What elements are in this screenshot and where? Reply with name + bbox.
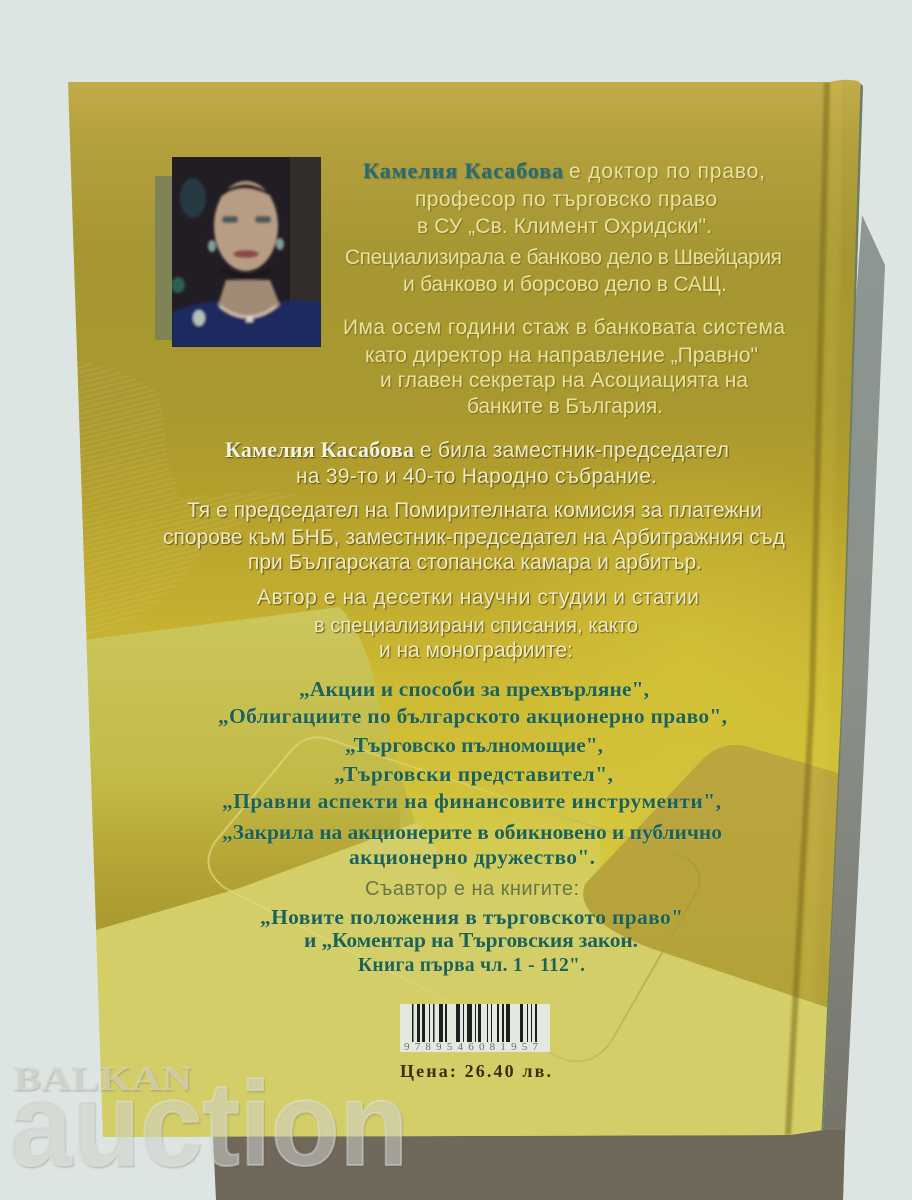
experience paragraph: банките в България. bbox=[467, 395, 663, 418]
chair paragraph: при Българската стопанска камара и арбитър. bbox=[248, 551, 702, 574]
spine highlight bbox=[827, 213, 836, 422]
monograph list: „Закрила на акционерите в обикновено и публично bbox=[222, 820, 722, 844]
co-authored books: „Новите положения в търговското право" bbox=[260, 905, 683, 929]
specialization paragraph: и банково и борсово дело в САЩ. bbox=[403, 273, 727, 296]
book shadow: bottom dark surface bbox=[213, 1130, 845, 1200]
monograph list: „Търговски представител", bbox=[334, 762, 613, 786]
author of paragraph: в специализирани списания, както bbox=[314, 615, 638, 637]
deputy chair paragraph: на 39-то и 40-то Народно събрание. bbox=[296, 465, 657, 488]
experience paragraph: Има осем години стаж в банковата система bbox=[343, 316, 785, 339]
co-author label: Съавтор е на книгите: bbox=[365, 878, 579, 900]
spine fold shadow bbox=[788, 82, 827, 1135]
monograph list bbox=[218, 677, 727, 869]
mesh wave pattern bbox=[68, 360, 300, 640]
intro paragraph bbox=[363, 158, 765, 238]
specialization paragraph bbox=[345, 246, 782, 296]
chair paragraph bbox=[163, 499, 785, 574]
book shadow: right wedge bbox=[780, 215, 885, 1200]
barcode bbox=[400, 1004, 550, 1053]
dark rounded shape right bbox=[583, 745, 845, 1010]
spine edge bbox=[823, 84, 862, 1130]
pale left panel bbox=[68, 607, 415, 930]
watermark: auction: auction bbox=[9, 1057, 408, 1191]
deputy chair paragraph: Камелия Касабова bbox=[225, 437, 414, 462]
lower pale panel, soft right part bbox=[400, 812, 600, 902]
monograph list: „Облигациите по българското акционерно право", bbox=[218, 704, 727, 728]
monograph list: акционерно дружество". bbox=[349, 845, 595, 869]
monograph list: „Акции и способи за прехвърляне", bbox=[299, 677, 649, 701]
author photo bbox=[155, 157, 321, 347]
specialization paragraph: Специализирала е банково дело в Швейцария bbox=[345, 246, 782, 269]
author of paragraph: Автор е на десетки научни студии и статии bbox=[257, 586, 699, 609]
deputy chair paragraph: е била заместник-председател bbox=[420, 439, 729, 462]
book cover bbox=[60, 70, 870, 1150]
chair paragraph: Тя е председател на Помирителната комисия за платежни bbox=[187, 499, 762, 522]
intro line two: професор по търговско право bbox=[415, 188, 717, 211]
experience paragraph: и главен секретар на Асоциацията на bbox=[380, 369, 748, 392]
intro line three: в СУ „Св. Климент Охридски". bbox=[417, 215, 712, 238]
intro line one rest: е доктор по право, bbox=[569, 160, 765, 183]
co-authored books: и „Коментар на Търговския закон. bbox=[304, 928, 638, 952]
price: Цена: 26.40 лв. bbox=[400, 1061, 551, 1081]
deputy chair paragraph bbox=[225, 437, 729, 488]
barcode number: 9789546081957 bbox=[404, 1041, 538, 1053]
author of paragraph: и на монографиите: bbox=[379, 639, 573, 662]
monograph list: „Търговско пълномощие", bbox=[345, 733, 603, 757]
experience paragraph bbox=[343, 316, 785, 418]
watermark: BALKAN: BALKAN bbox=[13, 1059, 192, 1098]
chair paragraph: спорове към БНБ, заместник-председател на Арбитражния съд bbox=[163, 526, 785, 549]
co-authored books: Книга първа чл. 1 - 112". bbox=[358, 955, 585, 976]
author of paragraph bbox=[257, 586, 699, 662]
author name in teal: Камелия Касабова bbox=[363, 158, 563, 183]
watermark bbox=[9, 1057, 408, 1191]
experience paragraph: като директор на направление „Правно" bbox=[365, 344, 758, 367]
rounded outline shape bbox=[208, 737, 700, 1061]
co-authored books bbox=[260, 905, 683, 976]
monograph list: „Правни аспекти на финансовите инструменти", bbox=[222, 789, 721, 813]
lower pale panel bbox=[90, 822, 830, 1140]
